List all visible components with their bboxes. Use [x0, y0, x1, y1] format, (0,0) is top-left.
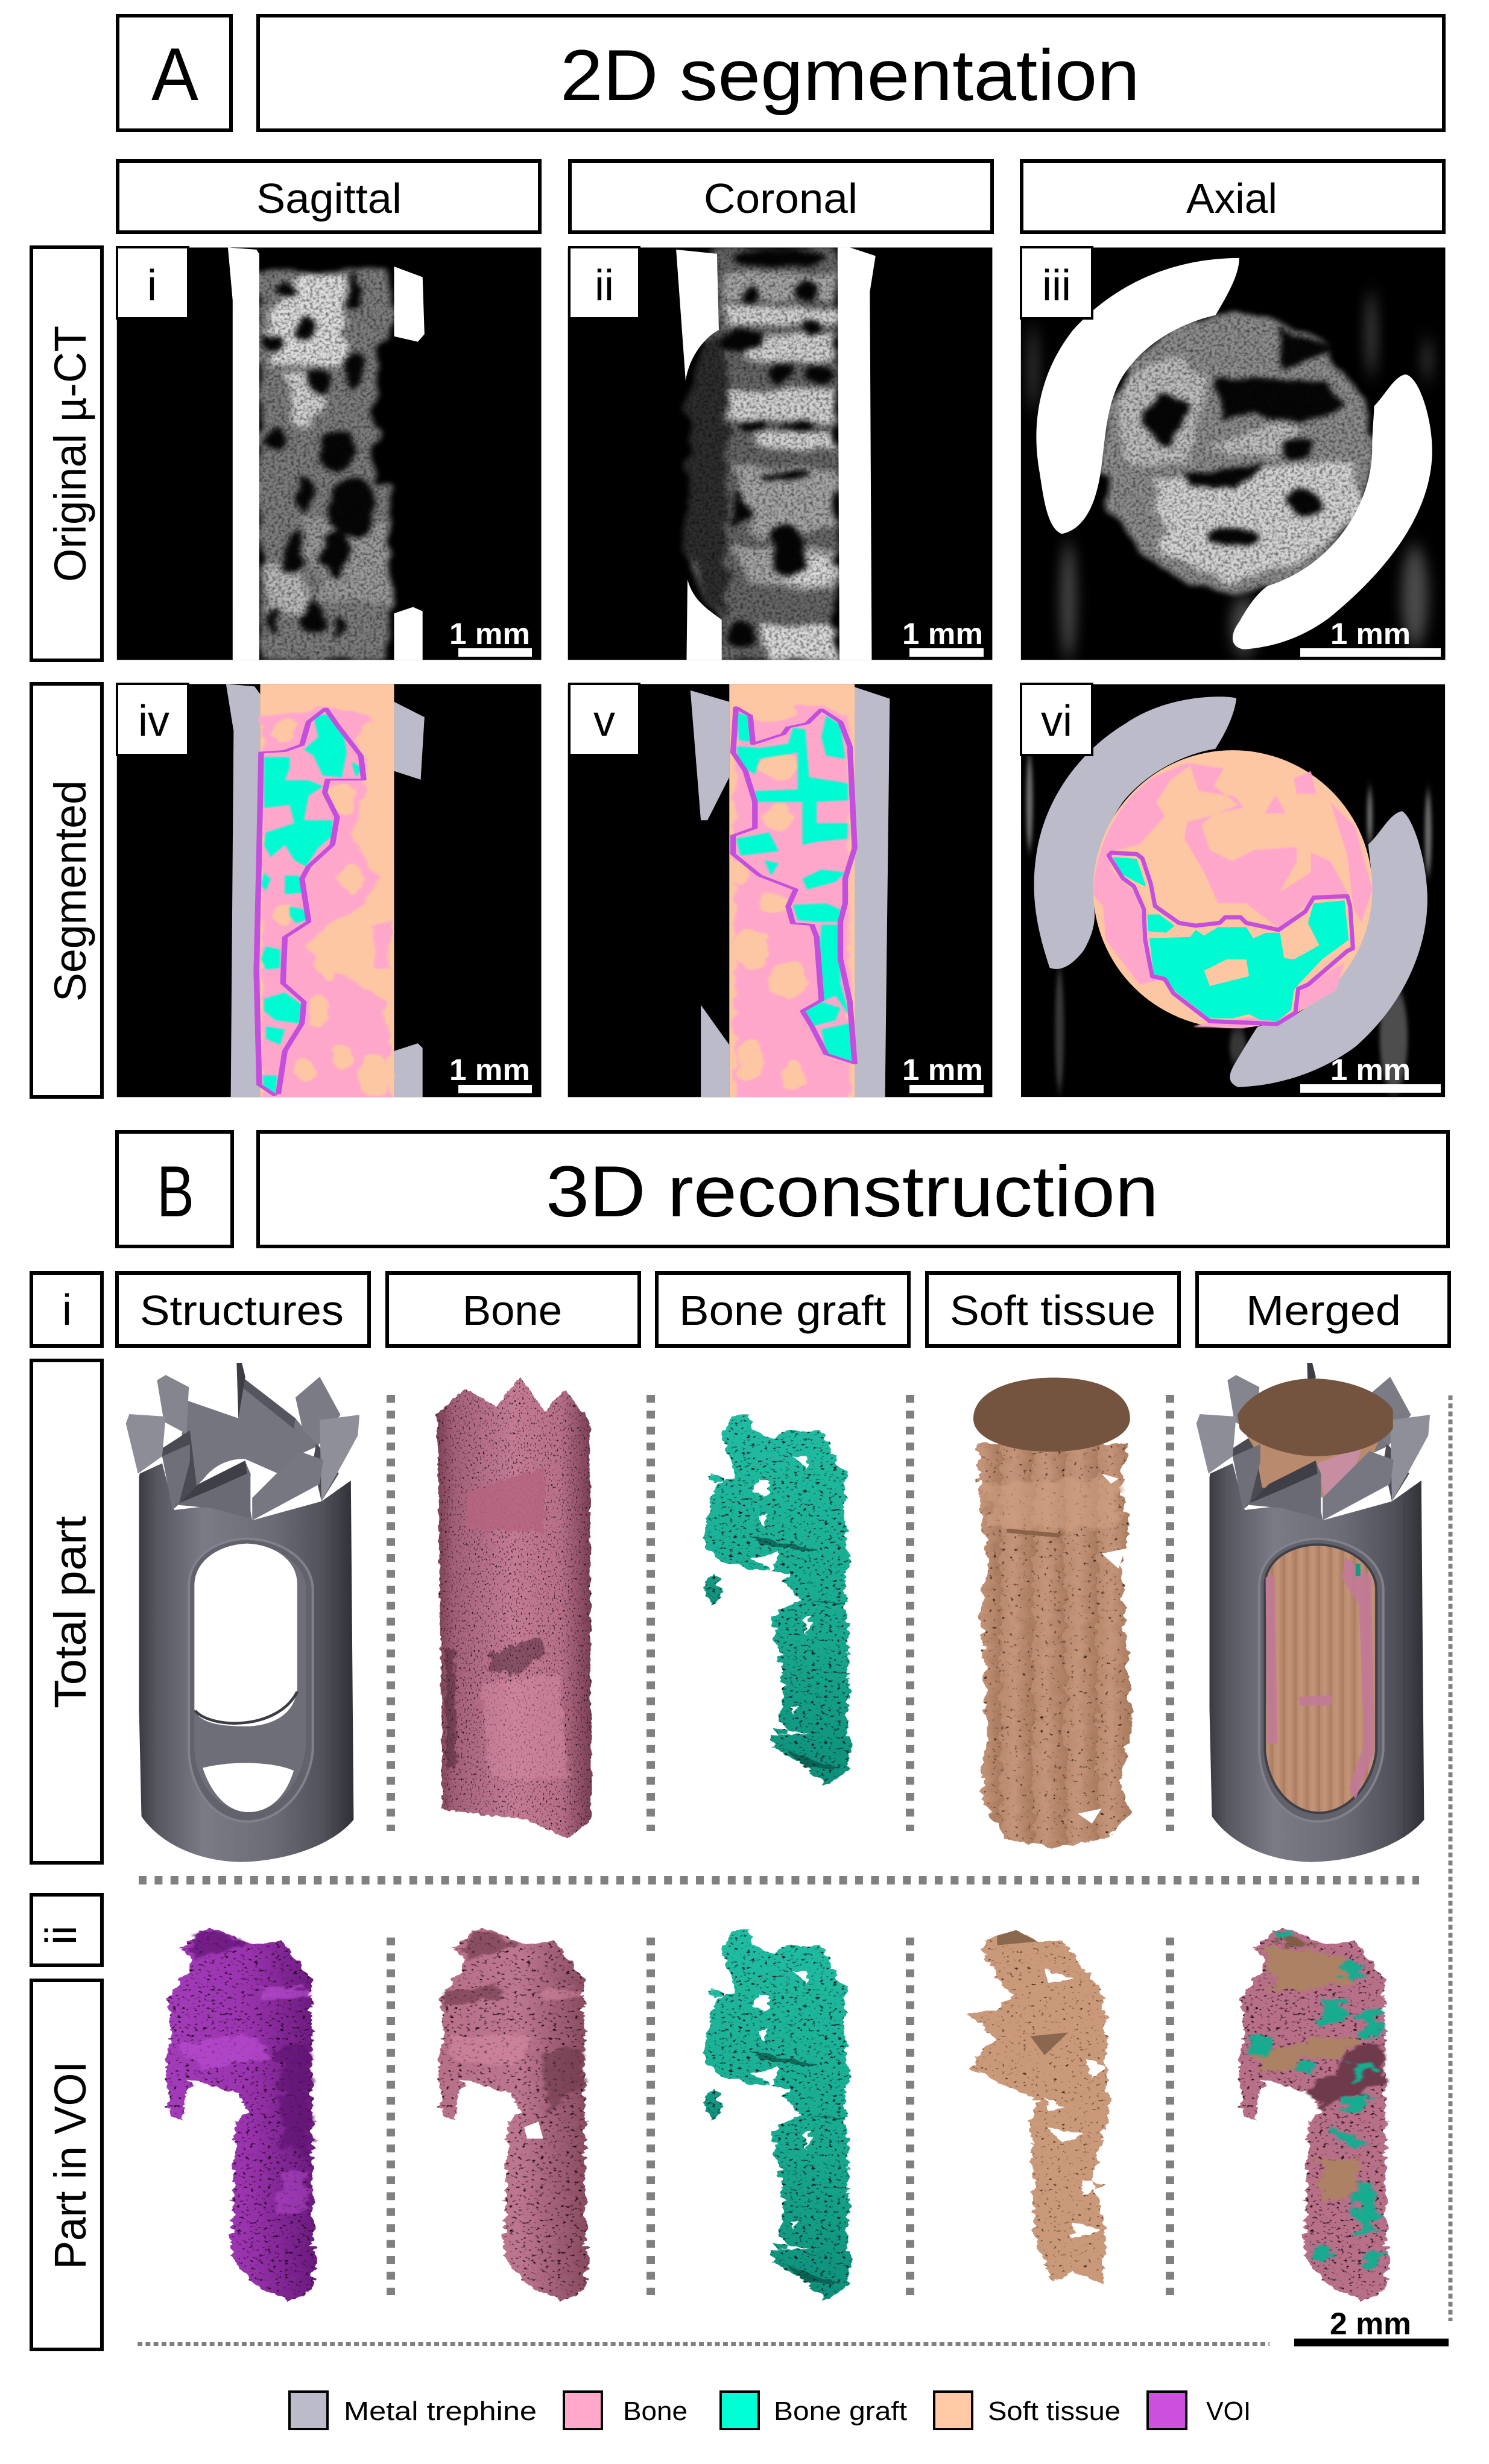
row label: Original µ-CT [31, 247, 102, 660]
column header: Structures [117, 1273, 369, 1346]
scale bar 1 mm: 1 mm [902, 617, 983, 651]
legend item: soft tissue: Soft tissue [988, 2396, 1121, 2426]
column header: Sagittal [118, 161, 540, 232]
bone texture [686, 247, 838, 660]
3D model: bone graft [703, 1414, 850, 1786]
soft tissue [260, 684, 394, 1097]
column header: Bone [387, 1273, 639, 1346]
panel iii: axial CT [1021, 247, 1446, 660]
scale bar 1 mm: 1 mm [902, 1053, 983, 1087]
3D model: metal trephine structure [126, 1363, 359, 1862]
title: 2D segmentation: 2D segmentation [560, 35, 1140, 116]
3D model: bone in VOI [438, 1927, 586, 2301]
row label: Part in VOI: Part in VOI [45, 2061, 95, 2269]
metal trephine [1034, 697, 1427, 1087]
heading box: A: A [151, 33, 198, 116]
row label: Part in VOI [31, 1980, 102, 2349]
panel tag vi: vi [1041, 697, 1072, 745]
heading box: B [117, 1132, 232, 1246]
panel tag iv: iv [138, 697, 169, 745]
column header: Bone graft [657, 1273, 909, 1346]
bone [262, 706, 391, 1100]
window contents [1265, 1544, 1376, 1813]
row tag ii: ii [37, 1925, 86, 1945]
legend item: VOI: VOI [1206, 2396, 1251, 2426]
column header: Structures: Structures [140, 1287, 344, 1334]
scale bar 2 mm: 2 mm [1330, 2307, 1411, 2342]
vertical divider dotted lines, total part [391, 1395, 1170, 1831]
VOI outline [256, 709, 364, 1096]
legend item: metal trephine [289, 2392, 537, 2429]
panel tag i: i [147, 262, 157, 310]
scale bar 1 mm [1300, 1053, 1441, 1093]
heading box: A [118, 16, 231, 130]
3D model: bone [435, 1377, 592, 1839]
soft tissue disc [1093, 750, 1373, 1028]
column header: Coronal: Coronal [704, 175, 858, 222]
panel tag vi [1021, 684, 1092, 755]
column header: Merged [1197, 1273, 1449, 1346]
column header: Bone: Bone [463, 1287, 562, 1334]
legend item: bone graft: Bone graft [774, 2396, 907, 2426]
scale bar 2 mm [1294, 2307, 1449, 2346]
disc texture [1101, 315, 1372, 592]
column header: Bone graft: Bone graft [679, 1287, 886, 1334]
row label: Segmented [31, 684, 102, 1097]
legend item: soft tissue [934, 2392, 1121, 2429]
3D model: merged in VOI [1239, 1927, 1386, 2301]
panel iv: sagittal segmented [117, 684, 542, 1100]
legend item: bone: Bone [623, 2396, 688, 2426]
column header: Axial: Axial [1186, 175, 1277, 222]
column header: Axial [1022, 161, 1444, 232]
title: 3D reconstruction [258, 1132, 1448, 1246]
heading box: B: B [157, 1151, 194, 1232]
3D model: VOI [166, 1927, 314, 2301]
column header: Sagittal: Sagittal [256, 175, 402, 222]
legend item: VOI [1148, 2392, 1251, 2429]
column header: Soft tissue: Soft tissue [950, 1287, 1155, 1334]
panel i: sagittal CT [117, 247, 542, 660]
bottom dotted line [138, 2342, 1269, 2346]
scale bar 1 mm: 1 mm [449, 1053, 530, 1087]
column header: Soft tissue [927, 1273, 1179, 1346]
panel ii: coronal CT [568, 247, 992, 660]
panel tag v: v [593, 697, 615, 745]
legend [289, 2392, 1251, 2429]
panel vi: axial segmented [1021, 684, 1445, 1097]
row label: Segmented: Segmented [45, 780, 95, 1002]
right dotted frame line [1449, 1395, 1452, 2321]
row tag ii [31, 1895, 102, 1965]
row label: Total part [31, 1360, 102, 1863]
column header: Coronal [570, 161, 992, 232]
panel v: coronal segmented [568, 684, 992, 1100]
legend item: bone [564, 2392, 688, 2429]
3D model: bone graft in VOI [703, 1928, 850, 2301]
title: 3D reconstruction: 3D reconstruction [546, 1151, 1159, 1232]
brown disc [1238, 1379, 1393, 1456]
3D model: merged [1197, 1363, 1430, 1862]
scale bar 1 mm [1300, 617, 1441, 657]
column header: Merged: Merged [1246, 1287, 1401, 1334]
panel tag ii: ii [595, 262, 614, 310]
row tag i: i [62, 1286, 72, 1335]
panel tag i [117, 247, 188, 318]
vertical divider dotted lines, VOI part [391, 1938, 1170, 2295]
soft tissue [729, 684, 855, 1097]
VOI outline [733, 707, 855, 1063]
scale bar 1 mm: 1 mm [1330, 1053, 1411, 1087]
legend item: metal trephine: Metal trephine [344, 2396, 537, 2426]
bone graft [736, 713, 853, 1062]
panel tag v [569, 684, 639, 755]
row label: Original µ-CT: Original µ-CT [45, 326, 95, 582]
metal trephine [691, 686, 890, 1097]
tissue top [1238, 1422, 1386, 1498]
bone graft [1113, 857, 1348, 1021]
panel tag iv [117, 684, 188, 755]
title: 2D segmentation [258, 16, 1444, 130]
row label: Total part: Total part [45, 1516, 95, 1708]
scale bar 1 mm: 1 mm [1330, 617, 1411, 651]
horizontal divider dotted line [139, 1876, 1419, 1884]
panel tag ii [569, 247, 639, 318]
streak artefacts [1026, 754, 1432, 1091]
VOI outline [1108, 853, 1353, 1024]
bone [735, 703, 849, 1100]
panel tag iii [1021, 247, 1092, 318]
legend item: bone graft [721, 2392, 907, 2429]
3D model: soft tissue in VOI [969, 1930, 1109, 2285]
metal trephine [226, 684, 425, 1097]
panel tag iii: iii [1042, 262, 1071, 310]
bone graft [261, 714, 362, 1094]
bone texture [259, 271, 391, 660]
bone [1093, 763, 1373, 1028]
3D model: soft tissue [973, 1378, 1132, 1848]
scale bar 1 mm: 1 mm [449, 617, 530, 651]
row tag i [31, 1273, 102, 1346]
